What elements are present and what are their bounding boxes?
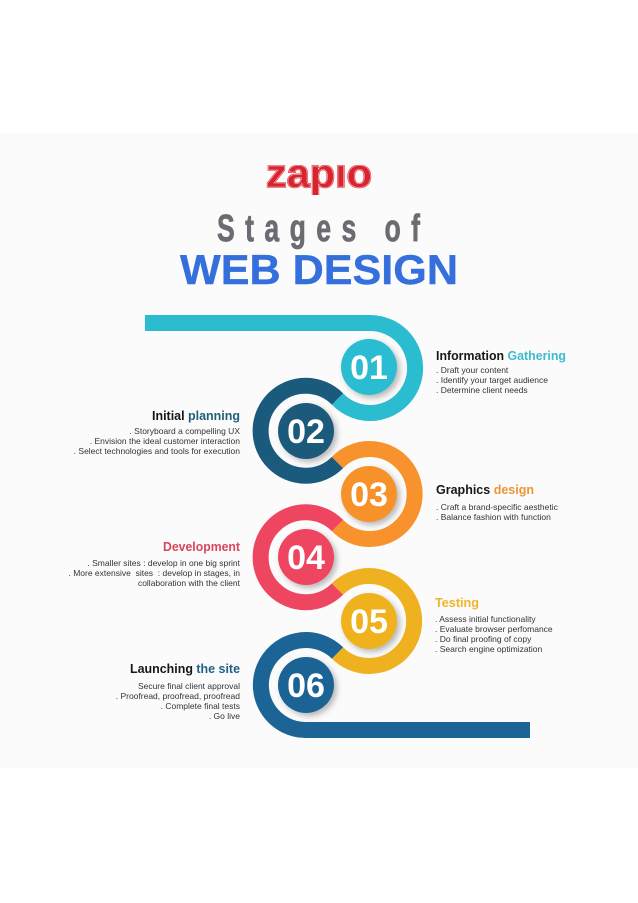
title: Stages of: Stages of (217, 206, 420, 249)
badge: 05: 05 (350, 603, 388, 641)
text block: Launching the site: . Proofread, proofread, proofread (116, 691, 240, 701)
text block: Development: collaboration with the client (138, 578, 241, 588)
text block: Information Gathering: . Determine client needs (436, 385, 528, 395)
badge: 03: 03 (350, 476, 388, 514)
text block: Graphics design (436, 482, 559, 522)
text block: Information Gathering: . Identify your target audience (436, 375, 548, 385)
text block: Information Gathering: Information Gathering (436, 348, 566, 363)
badge: 05 (341, 593, 397, 649)
text block: Graphics design: . Craft a brand-specific aesthetic (436, 502, 559, 512)
text block: Information Gathering: . Draft your content (436, 365, 509, 375)
badge: 04 (278, 529, 334, 585)
text block: Graphics design: . Balance fashion with function (436, 512, 551, 522)
text block: Graphics design: Graphics design (436, 482, 534, 497)
text block: Initial planning: . Select technologies and tools for execution (74, 446, 240, 456)
logo: zapio: zapio (266, 152, 372, 196)
badge: 02: 02 (287, 413, 325, 451)
badge: 03 (341, 466, 397, 522)
badge: 01: 01 (350, 349, 388, 387)
timeline: ribbon rings (145, 323, 530, 730)
text block: Development (68, 539, 241, 588)
logo: zapio (266, 165, 372, 195)
text block: Testing: . Evaluate browser perfomance (435, 624, 553, 634)
badge: 04: 04 (287, 539, 325, 577)
panel: background (0, 133, 638, 768)
text block: Testing (435, 595, 553, 654)
text block: Testing: Testing (435, 595, 479, 610)
text block: Testing: . Assess initial functionality (435, 614, 536, 624)
text block: Initial planning (74, 408, 240, 456)
text block: Testing: . Do final proofing of copy (435, 634, 532, 644)
text block: Development: . Smaller sites : develop in one big sprint (87, 558, 241, 568)
text block: Launching the site (116, 661, 240, 721)
text block: Development: Development (163, 539, 241, 554)
text block: Development: . More extensive sites : develop in stages, in (68, 568, 240, 578)
text block: Launching the site: Launching the site (130, 661, 240, 676)
badge: 01 (341, 339, 397, 395)
text block: Launching the site: . Complete final tests (161, 701, 240, 711)
badge: 06 (278, 657, 334, 713)
text block: Initial planning: . Storyboard a compelling UX (129, 426, 240, 436)
badge: 02 (278, 403, 334, 459)
logo: zapio: zapio (266, 152, 372, 196)
text block: Testing: . Search engine optimization (435, 644, 543, 654)
badge: 06: 06 (287, 667, 325, 705)
text block: Information Gathering (436, 348, 566, 395)
text block: Launching the site: Secure final client approval (138, 681, 240, 691)
title: WEB DESIGN: WEB DESIGN (180, 246, 458, 293)
text block: Initial planning: . Envision the ideal customer interaction (90, 436, 240, 446)
text block: Launching the site: . Go live (209, 711, 240, 721)
text block: Initial planning: Initial planning (152, 408, 240, 423)
